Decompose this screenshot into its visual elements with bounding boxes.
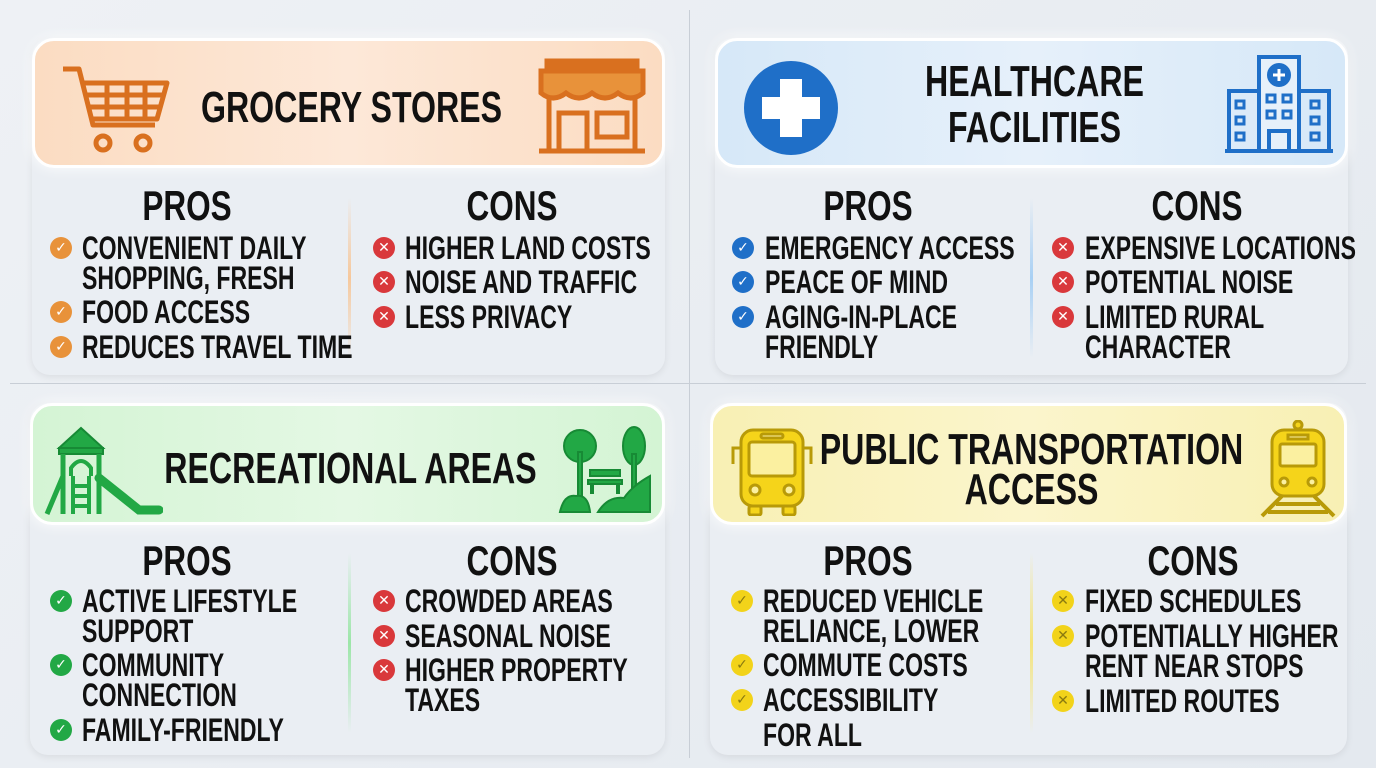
panel: grocery stores: NOISE AND TRAFFIC [405, 264, 637, 300]
panel: grocery stores: ✓ [55, 304, 67, 320]
panel: healthcare: EMERGENCY ACCESS [765, 230, 1015, 266]
cons heading: CONS [466, 182, 558, 229]
panel: healthcare: ✕ [1057, 240, 1069, 256]
panel: healthcare: ✓ [737, 240, 749, 256]
panel: public transportation: ✕ [1057, 593, 1069, 609]
panel: public transportation: ✓ [736, 593, 748, 609]
title: healthcare [925, 57, 1144, 152]
pros list: transportation [731, 583, 983, 753]
pros heading: PROS [142, 182, 232, 229]
panel: healthcare: FRIENDLY [765, 329, 878, 365]
icon: shopping cart [63, 66, 170, 152]
panel: public transportation: LIMITED ROUTES [1085, 683, 1280, 719]
panel: public transportation [710, 403, 1347, 755]
panel: recreational: ✓ [55, 722, 67, 738]
panel: public transportation: FIXED SCHEDULES [1085, 583, 1301, 619]
panel: recreational: SUPPORT [82, 613, 193, 649]
panel: public transportation: FOR ALL [763, 717, 862, 753]
center cross dividers [689, 10, 690, 758]
title: recreational: RECREATIONAL AREAS [164, 444, 537, 493]
panel: healthcare: CHARACTER [1085, 329, 1231, 365]
panel: public transportation: ACCESSIBILITY [763, 682, 938, 718]
cons list: transportation [1052, 583, 1338, 719]
panel: public transportation: COMMUTE COSTS [763, 647, 968, 683]
panel: public transportation: ✕ [1057, 628, 1069, 644]
panel: recreational: CROWDED AREAS [405, 583, 613, 619]
panel: recreational: ✕ [378, 628, 390, 644]
cons list: grocery [373, 230, 651, 335]
pros list: grocery [50, 230, 353, 365]
icon: playground [44, 426, 163, 515]
panel: public transportation: RELIANCE, LOWER [763, 613, 979, 649]
title: healthcare: HEALTHCARE [925, 57, 1144, 106]
cons list: healthcare [1052, 230, 1356, 365]
panel: public transportation: REDUCED VEHICLE [763, 583, 983, 619]
panel: grocery stores: HIGHER LAND COSTS [405, 230, 651, 266]
panel: healthcare [715, 38, 1348, 375]
panel: grocery stores: ✕ [378, 309, 390, 325]
panel: healthcare: AGING-IN-PLACE [765, 299, 957, 335]
panel: grocery stores: REDUCES TRAVEL TIME [82, 329, 353, 365]
pros heading: PROS [823, 537, 913, 584]
panel: recreational: HIGHER PROPERTY [405, 652, 628, 688]
icon: medical cross [744, 61, 838, 155]
pros heading: PROS [142, 537, 232, 584]
pros heading: PROS [823, 182, 913, 229]
header: grocery [32, 38, 665, 168]
panel: healthcare: LIMITED RURAL [1085, 299, 1264, 335]
panel: grocery stores: ✕ [378, 240, 390, 256]
cons heading: CONS [1151, 182, 1243, 229]
icon: hospital [1225, 55, 1333, 153]
panel: public transportation: ✓ [736, 657, 748, 673]
panel: recreational: ACTIVE LIFESTYLE [82, 583, 297, 619]
title: transportation: PUBLIC TRANSPORTATION [820, 425, 1243, 474]
icon: bus [732, 428, 812, 516]
panel: healthcare: ✕ [1057, 274, 1069, 290]
title: grocery: GROCERY STORES [201, 83, 502, 132]
panel: recreational: CONNECTION [82, 677, 237, 713]
title: transportation [820, 425, 1243, 514]
panel: healthcare: ✓ [737, 274, 749, 290]
panel: grocery stores: SHOPPING, FRESH [82, 260, 295, 296]
header: transportation [710, 403, 1347, 525]
panel: healthcare: EXPENSIVE LOCATIONS [1085, 230, 1356, 266]
panel: recreational: SEASONAL NOISE [405, 618, 611, 654]
cons heading: CONS [466, 537, 558, 584]
panel: grocery stores: ✕ [378, 274, 390, 290]
panel: public transportation: POTENTIALLY HIGHER [1085, 618, 1338, 654]
panel: recreational: FAMILY-FRIENDLY [82, 712, 284, 748]
panel: public transportation: ✓ [736, 692, 748, 708]
panel: healthcare: PEACE OF MIND [765, 264, 948, 300]
header: recreational [30, 403, 665, 525]
panel: public transportation: ✕ [1057, 693, 1069, 709]
pros list: healthcare [732, 230, 1015, 365]
panel: grocery stores: ✓ [55, 339, 67, 355]
panel: recreational: COMMUNITY [82, 647, 224, 683]
panel: healthcare: POTENTIAL NOISE [1085, 264, 1293, 300]
panel: healthcare: ✓ [737, 309, 749, 325]
panel: recreational: ✓ [55, 593, 67, 609]
panel: recreational: ✕ [378, 662, 390, 678]
panel: recreational: TAXES [405, 682, 480, 718]
header: healthcare [715, 38, 1348, 168]
panel: grocery stores [32, 38, 665, 375]
panel: healthcare: ✕ [1057, 309, 1069, 325]
icon: park trees and bench [558, 426, 651, 513]
cons list: recreational [373, 583, 628, 718]
panel: grocery stores: LESS PRIVACY [405, 299, 572, 335]
panel: grocery stores: CONVENIENT DAILY [82, 230, 306, 266]
title: healthcare: FACILITIES [948, 103, 1121, 152]
panel: grocery stores: FOOD ACCESS [82, 294, 250, 330]
pros list: recreational [50, 583, 297, 748]
panel: grocery stores: ✓ [55, 240, 67, 256]
panel: public transportation: RENT NEAR STOPS [1085, 648, 1303, 684]
panel: recreational [30, 403, 665, 755]
title: transportation: ACCESS [965, 465, 1098, 514]
icon: store [538, 58, 646, 154]
panel: recreational: ✓ [55, 657, 67, 673]
panel: recreational: ✕ [378, 593, 390, 609]
icon: train [1260, 420, 1336, 518]
cons heading: CONS [1147, 537, 1239, 584]
